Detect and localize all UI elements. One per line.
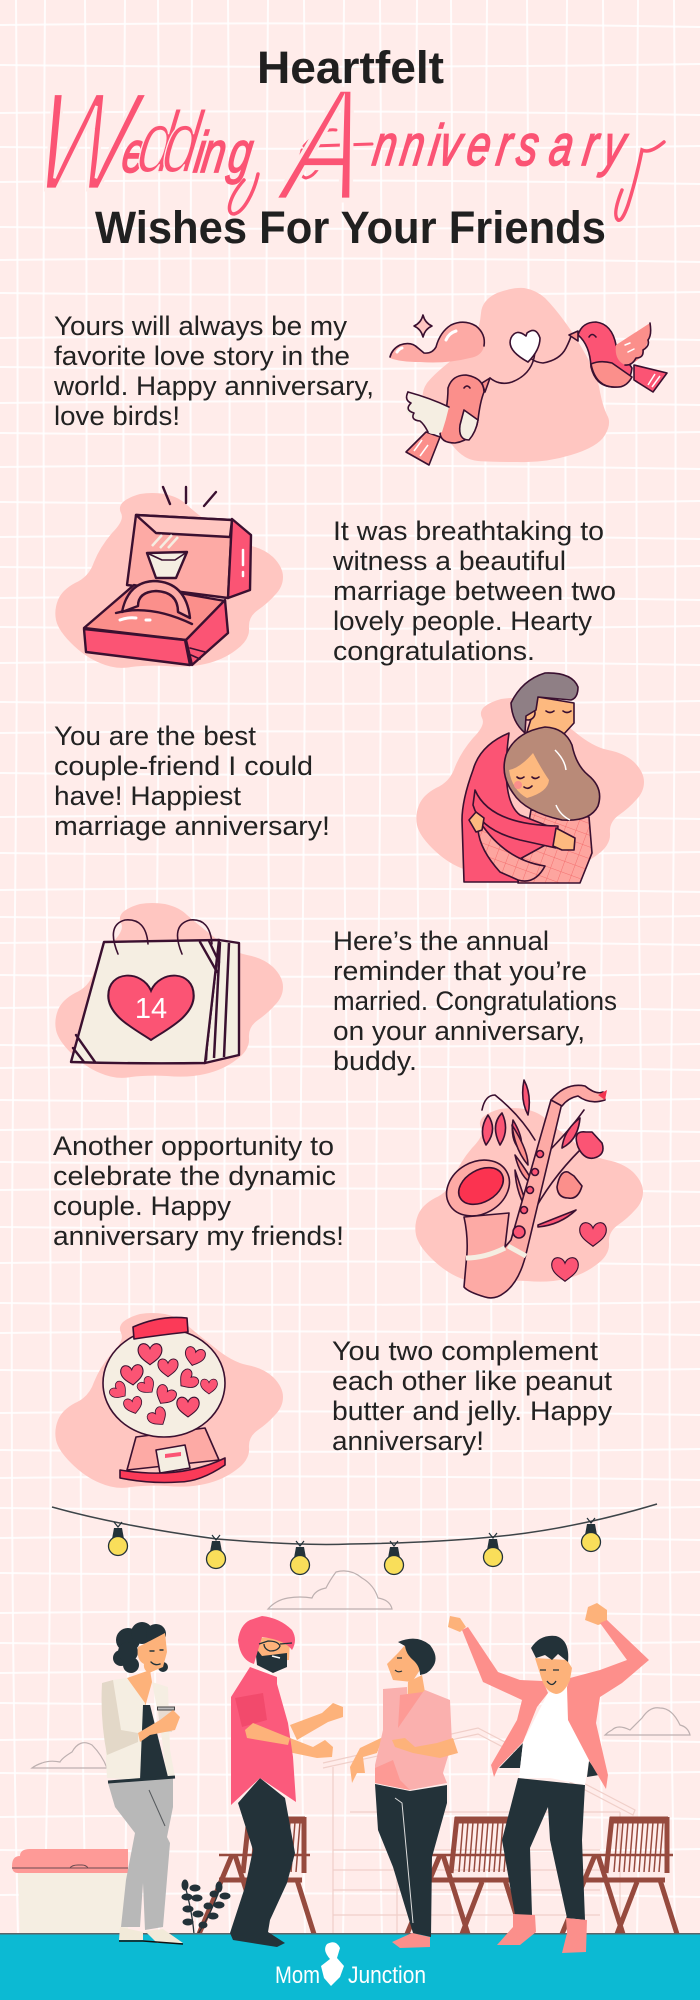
- plant: [182, 1880, 230, 1934]
- jacket: [106, 1678, 175, 1780]
- text: wish 3: You are the best: [54, 721, 257, 751]
- text: wish 1: favorite love story in the: [54, 341, 350, 371]
- text: wish 5: [53, 1131, 344, 1251]
- text: wish 1: [53, 311, 374, 431]
- hearts: [580, 1223, 606, 1246]
- neck: [407, 1675, 425, 1712]
- text: wish 6: each other like peanut: [332, 1366, 613, 1396]
- icon: calendar with heart: [55, 903, 283, 1078]
- shoes: [119, 1927, 183, 1943]
- left arm: [350, 1737, 383, 1783]
- woman body: [518, 810, 592, 883]
- icon: gumball machine: [55, 1313, 283, 1488]
- text: wish 4: reminder that you’re: [333, 956, 587, 986]
- band: [120, 1458, 225, 1482]
- heading: Heartfelt: Heartfelt: [257, 42, 444, 93]
- man forearm: [473, 790, 558, 848]
- saxophone body: [464, 1100, 562, 1298]
- string lights: [52, 1504, 657, 1574]
- text: wish 2: witness a beautiful: [332, 546, 566, 576]
- heading: Wedding Anniversary script: [23, 54, 664, 234]
- heading: Wedding Anniversary script: y: [597, 112, 632, 178]
- cap: [133, 1317, 188, 1339]
- hair: [398, 1639, 436, 1675]
- clouds: [32, 1571, 690, 1768]
- text: wish 1: love birds!: [54, 401, 180, 431]
- text: wish 5: Another opportunity to: [53, 1131, 334, 1161]
- person: woman with cup: [102, 1622, 183, 1944]
- ring stem stripes: [152, 535, 178, 548]
- man body: [462, 733, 558, 882]
- person: dancing man: [448, 1603, 649, 1953]
- text: wish 4: buddy.: [333, 1046, 417, 1076]
- storage chest: [12, 1849, 128, 1933]
- heading: Wedding Anniversary script: e: [463, 112, 496, 178]
- glasses: [259, 1641, 292, 1651]
- arms: [290, 1703, 343, 1740]
- rings: [113, 920, 212, 954]
- text: wish 1: Yours will always be my: [54, 311, 348, 341]
- heading: Wedding Anniversary script: n: [369, 112, 402, 178]
- text: wish 4: on your anniversary,: [333, 1016, 585, 1046]
- trousers: [230, 1778, 295, 1947]
- text: wish 3: have! Happiest: [54, 781, 242, 811]
- pages: [205, 940, 239, 1063]
- face: [535, 1658, 572, 1694]
- floor: [0, 1933, 700, 2000]
- heading: Wedding Anniversary script: i: [425, 112, 446, 178]
- text: wish 2: [332, 516, 616, 666]
- heading: Wedding Anniversary script: r: [579, 112, 605, 178]
- title: [23, 42, 664, 253]
- hands: [448, 1616, 466, 1632]
- heart cloud: [390, 322, 484, 362]
- shine marks: [163, 487, 216, 506]
- top: [375, 1687, 452, 1790]
- page front: [71, 940, 219, 1063]
- woman hair and face: [504, 727, 600, 820]
- heading: Wedding Anniversary script: W: [25, 63, 153, 219]
- text: wish 6: You two complement: [332, 1336, 599, 1366]
- bell: [436, 1149, 520, 1227]
- trousers: [502, 1778, 585, 1920]
- hair: [531, 1636, 568, 1662]
- logo icon: [321, 1942, 344, 1986]
- box base: [84, 629, 190, 665]
- shirt: [140, 1705, 168, 1780]
- trousers: [375, 1784, 447, 1937]
- heading: Wedding Anniversary script: s: [513, 112, 544, 178]
- heading: Wishes For Your Friends: Wishes For Your Friends: [95, 202, 606, 253]
- icon: calendar with heart: 14: [135, 993, 167, 1025]
- text: wish 1: world. Happy anniversary,: [53, 371, 374, 401]
- text: wish 4: married. Congratulations: [333, 986, 617, 1016]
- text: wish 5: couple. Happy: [53, 1191, 232, 1221]
- text: wish 6: [332, 1336, 613, 1456]
- jacket lining: [499, 1743, 599, 1777]
- stems and leaves: [482, 1095, 584, 1218]
- right arm: [392, 1738, 458, 1758]
- text: wish 5: anniversary my friends!: [53, 1221, 344, 1251]
- chairs: [199, 1817, 677, 1934]
- tulips: [576, 1132, 603, 1158]
- hat: [238, 1616, 295, 1664]
- heading: Wedding Anniversary script: v: [435, 112, 469, 178]
- heading: Wedding Anniversary script: d: [157, 94, 209, 191]
- bird right: [634, 365, 667, 392]
- heading: Wedding Anniversary script: n: [397, 112, 430, 178]
- text: wish 6: butter and jelly. Happy: [332, 1396, 613, 1426]
- heading: Wedding Anniversary script: g: [224, 119, 258, 185]
- heading: Wedding Anniversary script: d: [132, 94, 184, 191]
- heart string: [490, 335, 571, 383]
- logo: MomJunction: [275, 1942, 426, 1989]
- base cone: [127, 1428, 219, 1470]
- hair: [113, 1622, 168, 1673]
- boots: [497, 1914, 536, 1945]
- text: wish 2: congratulations.: [333, 636, 535, 666]
- arm: [138, 1710, 180, 1742]
- door: [156, 1445, 190, 1473]
- shoe: [392, 1933, 430, 1948]
- icon: love birds: [390, 288, 667, 465]
- person: woman in pink: [350, 1639, 458, 1948]
- candy hearts: [108, 1344, 217, 1430]
- text: wish 2: marriage between two: [333, 576, 616, 606]
- hands: [553, 828, 575, 850]
- neck: [551, 1085, 605, 1106]
- text: wish 3: couple-friend I could: [54, 751, 313, 781]
- person: man with pink hat: [230, 1616, 343, 1947]
- woman sleeve: [478, 822, 545, 881]
- lid: [127, 515, 232, 598]
- cushion: [84, 585, 225, 640]
- neck and face: [127, 1670, 152, 1707]
- text: wish 5: celebrate the dynamic: [53, 1161, 336, 1191]
- shirt: [231, 1667, 296, 1805]
- heading: Wedding Anniversary script: n: [198, 119, 231, 185]
- text: wish 3: [54, 721, 330, 841]
- heading: Wedding Anniversary script: a: [545, 112, 579, 178]
- text: wish 3: marriage anniversary!: [54, 811, 330, 841]
- text: wish 4: Here’s the annual: [333, 926, 549, 956]
- heading: Wedding Anniversary script: i: [191, 119, 211, 185]
- text: wish 2: lovely people. Hearty: [333, 606, 593, 636]
- icon: saxophone with flowers: [415, 1080, 643, 1298]
- heading: Wedding Anniversary script: A: [269, 54, 380, 234]
- keys: [536, 1150, 544, 1158]
- house outline: [323, 1728, 635, 1934]
- text: wish 2: It was breathtaking to: [333, 516, 604, 546]
- bird left: [406, 432, 440, 465]
- beard: [255, 1647, 287, 1673]
- logo: MomJunction: Mom: [275, 1962, 320, 1989]
- text: wish 6: anniversary!: [332, 1426, 484, 1456]
- man head: [525, 697, 574, 738]
- heart: [108, 976, 194, 1040]
- face: [257, 1637, 290, 1662]
- face: [387, 1645, 422, 1682]
- heading: Wedding Anniversary script: e: [118, 119, 151, 185]
- heading: Wedding Anniversary script: r: [493, 112, 519, 178]
- pants: [108, 1778, 173, 1930]
- tee: [519, 1687, 589, 1785]
- jacket: [462, 1627, 548, 1777]
- cup: [158, 1708, 174, 1732]
- logo: MomJunction: Junction: [348, 1962, 426, 1989]
- icon: ring box: [55, 487, 283, 668]
- icon: hugging couple: [416, 673, 644, 883]
- globe: [103, 1329, 225, 1437]
- ring: [147, 552, 187, 578]
- text: wish 4: [333, 926, 617, 1076]
- sparkle: [414, 315, 432, 337]
